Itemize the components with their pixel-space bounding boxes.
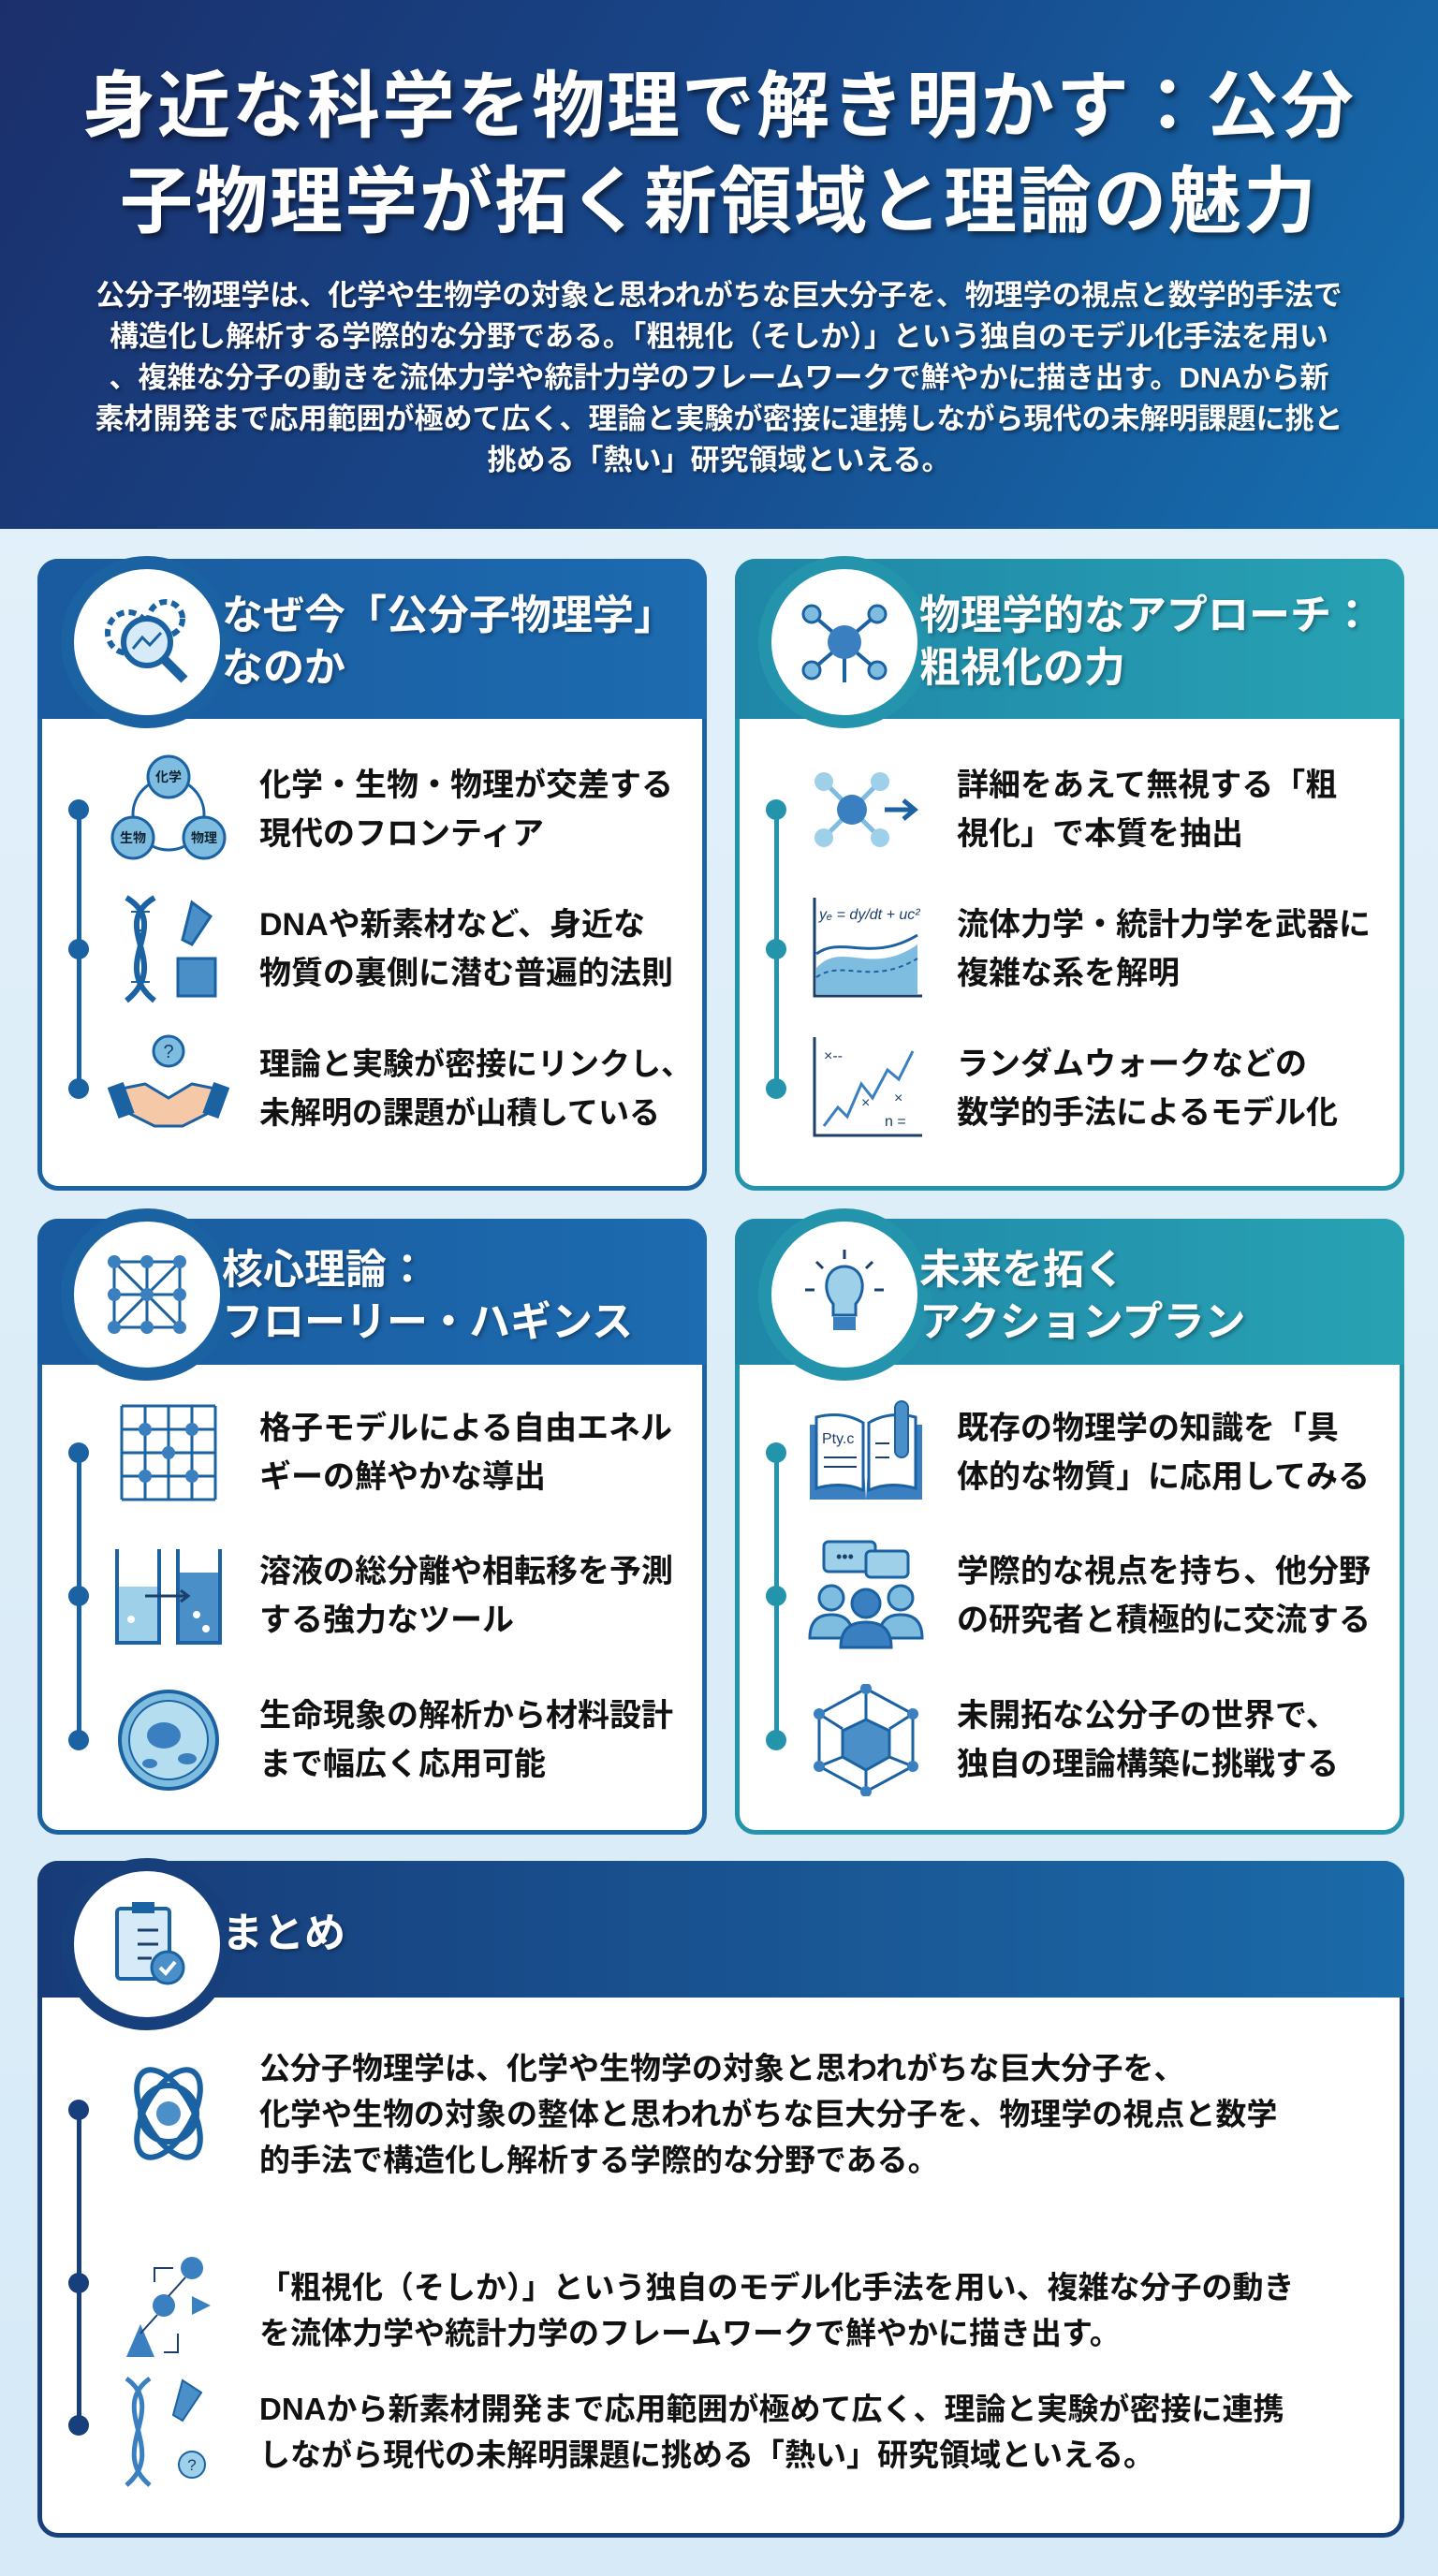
item: handshake — [108, 1035, 692, 1130]
intro text: 構造化し解析する学際的な分野である。「粗視化（そしか）」という独自のモデル化手法を用い — [110, 320, 1328, 353]
summary item 1: 的手法で構造化し解析する学際的な分野である。 — [259, 2142, 939, 2177]
item: beakers: 溶液の総分離や相転移を予測 — [259, 1554, 673, 1589]
panel: why now — [37, 559, 707, 1191]
item: lattice model — [120, 1404, 672, 1501]
title: 身近な科学を物理で解き明かす：公分 — [82, 65, 1356, 147]
panel title: 核心理論： — [222, 1247, 428, 1293]
item: book — [810, 1400, 1370, 1500]
header background — [0, 0, 1438, 529]
summary item 2 — [126, 2257, 1294, 2357]
item: fluid dynamics: 流体力学・統計力学を武器に — [957, 907, 1371, 943]
panel title: まとめ — [222, 1910, 345, 1956]
icon: network — [758, 556, 931, 728]
summary item 1: 公分子物理学は、化学や生物学の対象と思われがちな巨大分子を、 — [259, 2050, 1184, 2086]
summary item 2: 「粗視化（そしか）」という独自のモデル化手法を用い、複雑な分子の動き — [259, 2270, 1294, 2305]
item: lattice model: 格子モデルによる自由エネル — [259, 1411, 672, 1446]
panel title: なぜ今「公分子物理学」 — [222, 593, 675, 638]
summary item 3: しながら現代の未解明課題に挑める「熱い」研究領域といえる。 — [259, 2437, 1154, 2472]
item: beakers: する強力なツール — [259, 1603, 514, 1638]
panel: coarse graining — [735, 559, 1404, 1191]
intro text: 素材開発まで応用範囲が極めて広く、理論と実験が密接に連携しながら現代の未解明課題に挑と — [95, 402, 1343, 435]
item: coarse graining: 詳細をあえて無視する「粗 — [957, 768, 1337, 803]
intro text: 公分子物理学は、化学や生物学の対象と思われがちな巨大分子を、物理学の視点と数学的手法で — [95, 279, 1343, 312]
panel title — [222, 1247, 633, 1345]
panel: action plan — [735, 1219, 1404, 1835]
panel title: 未来を拓く — [919, 1247, 1125, 1293]
intro text: 挑める「熱い」研究領域といえる。 — [487, 444, 951, 476]
panel: Flory-Huggins — [37, 1219, 707, 1835]
title: 子物理学が拓く新領域と理論の魅力 — [120, 160, 1318, 242]
panel title — [222, 593, 675, 691]
item: random walk — [813, 1037, 1338, 1136]
item: cube network: 未開拓な公分子の世界で、 — [957, 1698, 1338, 1734]
summary item 3: ? — [187, 2456, 197, 2474]
summary item 3 — [125, 2377, 1284, 2487]
item: lattice model: ギーの鮮やかな導出 — [259, 1459, 546, 1495]
panel title: アクションプラン — [919, 1299, 1245, 1345]
intro text: 、複雑な分子の動きを流体力学や統計力学のフレームワークで鮮やかに描き出す。DNAから新 — [109, 361, 1329, 394]
item: cell: まで幅広く応用可能 — [259, 1747, 546, 1782]
item: random walk: × — [894, 1090, 902, 1106]
summary item 1 — [134, 2050, 1277, 2177]
item: intersection: 物理 — [191, 830, 217, 845]
item: DNA material: 物質の裏側に潜む普遍的法則 — [259, 956, 673, 991]
item: book: 既存の物理学の知識を「具 — [957, 1411, 1339, 1446]
panel title — [919, 593, 1372, 691]
item: people chat: の研究者と積極的に交流する — [957, 1603, 1371, 1638]
item: random walk: × — [861, 1095, 870, 1111]
panel title: 物理学的なアプローチ： — [919, 593, 1372, 638]
item: intersection: 化学 — [155, 769, 182, 784]
item: people chat: 学際的な視点を持ち、他分野 — [957, 1554, 1371, 1589]
item: intersection: 化学・生物・物理が交差する — [259, 768, 673, 803]
icon: clipboard — [61, 1858, 233, 2030]
title — [82, 65, 1357, 242]
panel title: フローリー・ハギンス — [222, 1299, 633, 1345]
summary item 1: 化学や生物の対象の整体と思われがちな巨大分子を、物理学の視点と数学 — [259, 2097, 1277, 2130]
panel title: 粗視化の力 — [919, 645, 1125, 691]
item: intersection: 生物 — [120, 830, 146, 845]
icon: lattice — [61, 1208, 233, 1381]
summary item 2: を流体力学や統計力学のフレームワークで鮮やかに描き出す。 — [259, 2316, 1121, 2350]
item: cell: 生命現象の解析から材料設計 — [259, 1698, 673, 1734]
item: fluid dynamics: yₑ = dy/dt + uc² — [818, 907, 920, 923]
item: handshake: 理論と実験が密接にリンクし、 — [259, 1046, 692, 1081]
panel title — [919, 1247, 1247, 1345]
icon: magnifier gears — [61, 556, 233, 728]
item: handshake: 未解明の課題が山積している — [259, 1095, 660, 1130]
summary item 3: DNAから新素材開発まで応用範囲が極めて広く、理論と実験が密接に連携 — [259, 2392, 1284, 2426]
item: coarse graining: 視化」で本質を抽出 — [957, 816, 1243, 852]
panel title: なのか — [222, 645, 345, 691]
item: fluid dynamics — [813, 898, 1371, 998]
item: random walk: ランダムウォークなどの — [957, 1046, 1307, 1082]
item: people chat: ••• — [836, 1547, 854, 1566]
item: intersection: 現代のフロンティア — [259, 816, 544, 852]
item: random walk: n = — [885, 1114, 906, 1130]
item: book: 体的な物質」に応用してみる — [957, 1459, 1370, 1495]
item: cube network — [814, 1684, 1339, 1796]
item: intersection — [110, 754, 673, 859]
item: DNA material — [125, 895, 673, 1003]
item: coarse graining — [814, 768, 1337, 852]
item: cube network: 独自の理論構築に挑戦する — [957, 1747, 1339, 1782]
item: random walk: ×-- — [824, 1048, 843, 1064]
intro text — [95, 279, 1343, 477]
item: beakers — [115, 1549, 673, 1645]
item: people chat — [809, 1541, 1371, 1649]
item: book: Pty.c — [822, 1431, 854, 1447]
item: DNA material: DNAや新素材など、身近な — [259, 907, 645, 943]
item: fluid dynamics: 複雑な系を解明 — [957, 956, 1180, 991]
item: random walk: 数学的手法によるモデル化 — [957, 1095, 1338, 1131]
panel: summary — [37, 1861, 1404, 2538]
icon: light bulb — [758, 1208, 931, 1381]
item: cell — [118, 1690, 673, 1791]
item: handshake: ? — [163, 1042, 174, 1062]
